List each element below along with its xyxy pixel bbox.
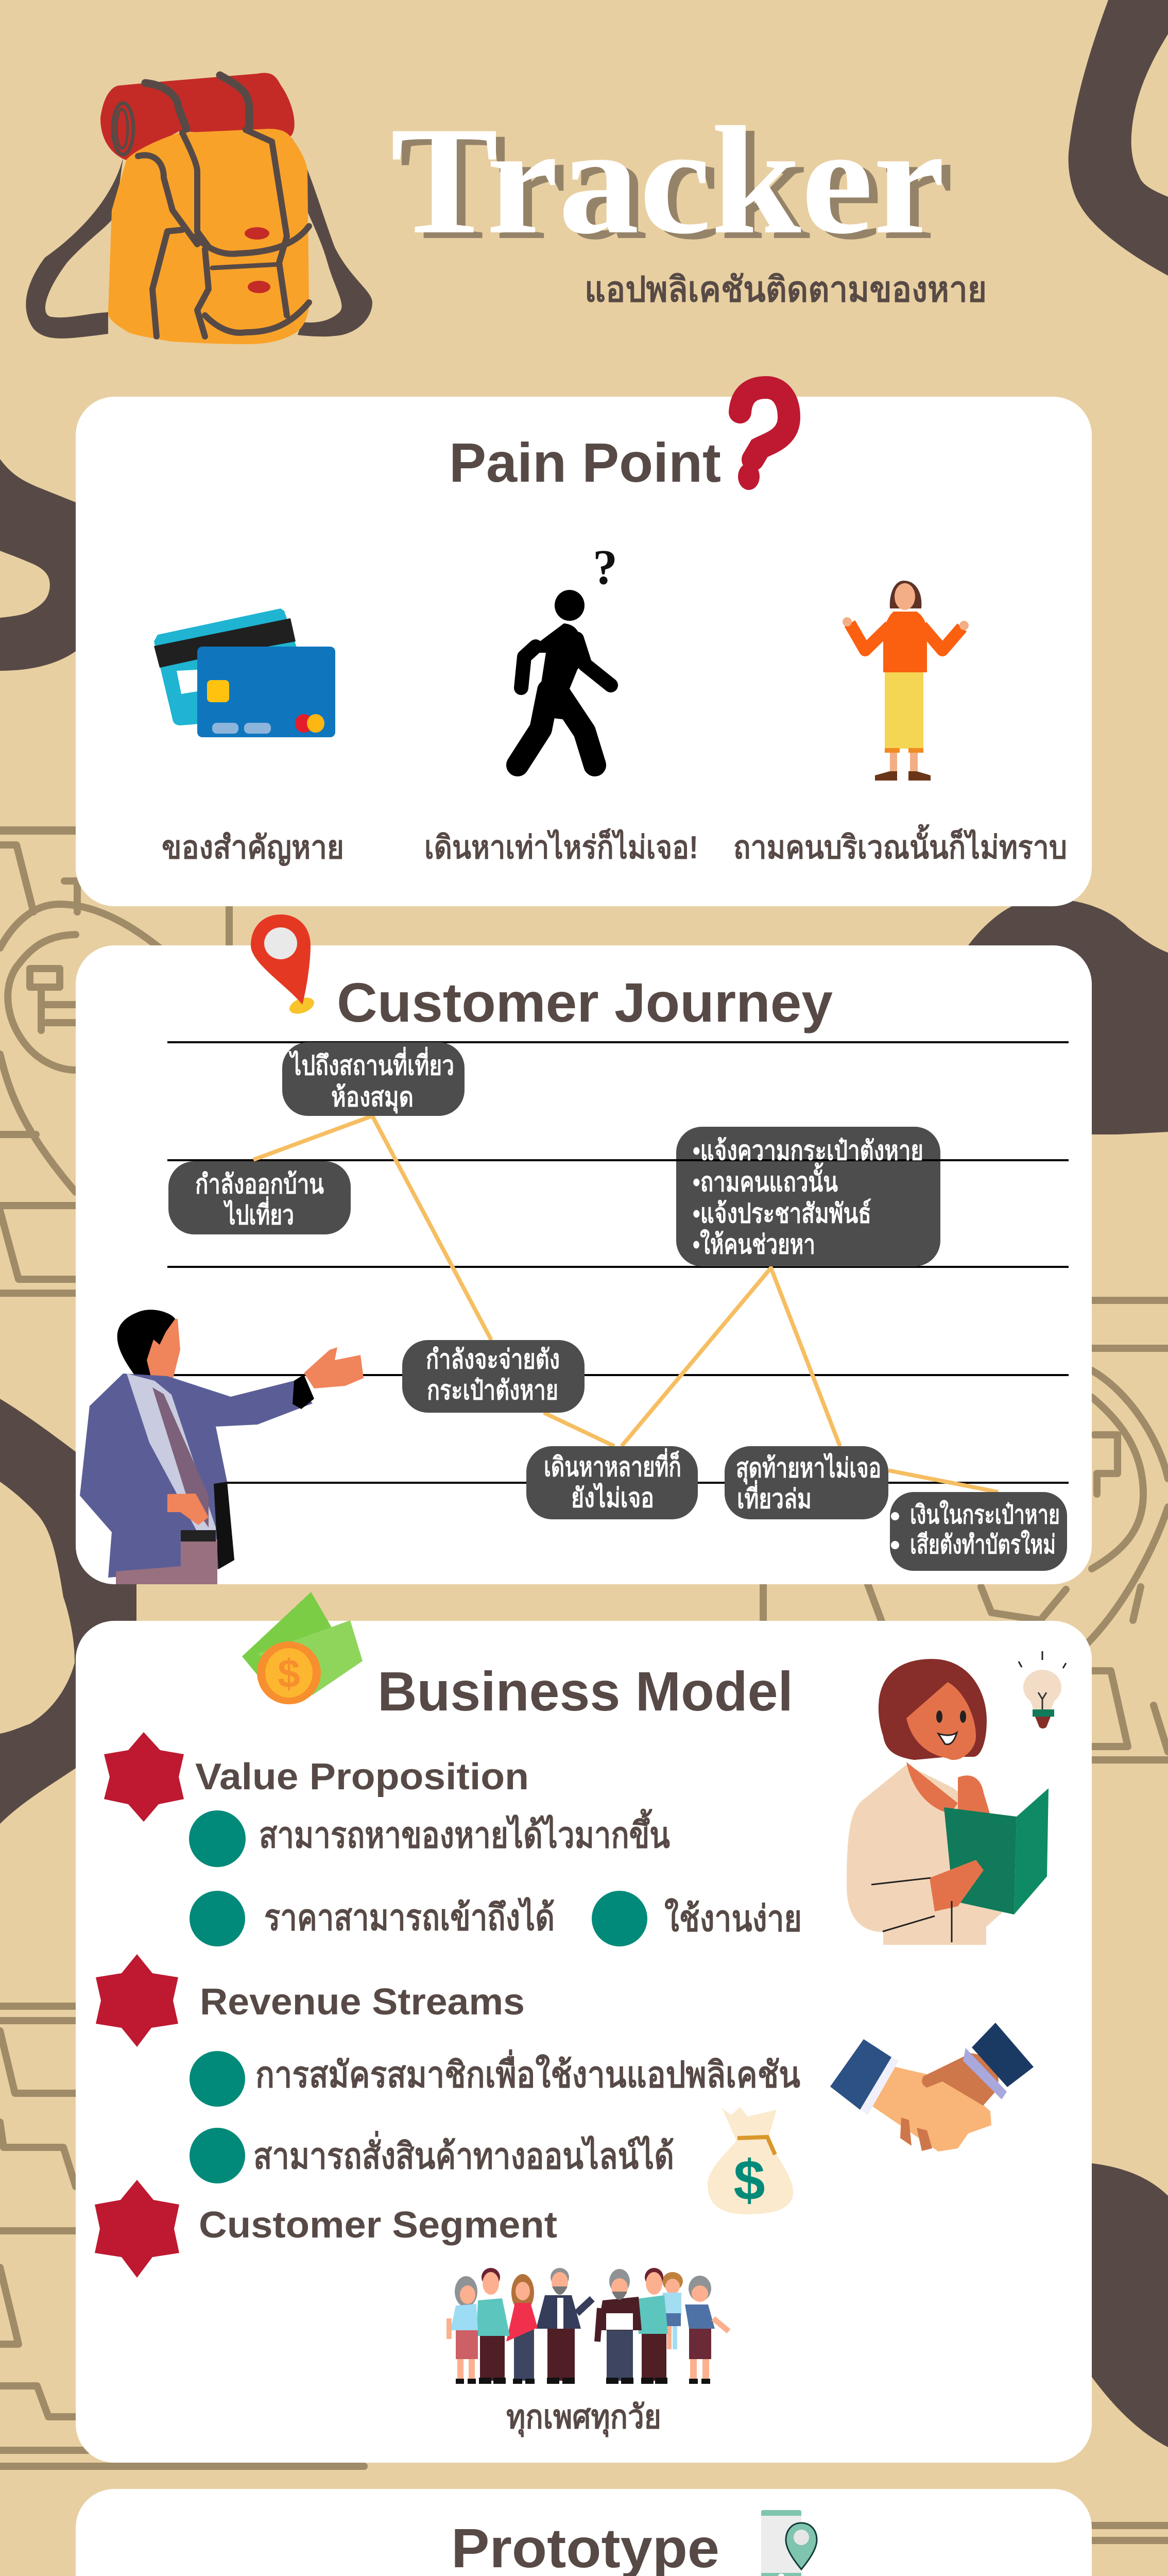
icon: backpack: [26, 73, 372, 344]
step: reporting lost wallet: •แจ้งความกระเป๋าตังหาย: [693, 1136, 923, 1166]
icon: credit cards: [154, 608, 335, 737]
step: wallet missing at payment: กำลังจะจ่ายตัง: [426, 1345, 560, 1375]
illustration: handshake: [830, 2023, 1034, 2151]
step: reporting lost wallet: [676, 1127, 940, 1266]
panel: Business Model: [76, 1592, 1092, 2463]
bullet: find lost items faster: สามารถหาของหายได้ไวมากขึ้น: [259, 1808, 670, 1855]
step: trip ruined: สุดท้ายหาไม่เจอ: [736, 1452, 881, 1485]
bullet: find lost items faster: [189, 1808, 670, 1867]
icon: money and coin: [242, 1592, 363, 1704]
panel: Pain Point: [76, 387, 1092, 906]
label: asked people nearby: ถามคนบริเวณนั้นก็ไม่ทราบ: [733, 824, 1067, 866]
panel: Customer Journey: [76, 914, 1092, 1584]
subtitle: แอปพลิเคชันติดตามของหาย: [585, 270, 987, 309]
icon: red question mark: [738, 387, 789, 490]
bullet: easy to use: [592, 1891, 802, 1946]
bullet: easy to use: ใช้งานง่าย: [664, 1897, 802, 1939]
step: wallet missing at payment: กระเป๋าตังหาย: [427, 1376, 558, 1405]
step: arrive at destination: ไปถึงสถานที่เที่ยว: [288, 1047, 454, 1081]
panel: Prototype: [76, 2489, 1092, 2576]
step: reporting lost wallet: •ถามคนแถวนั้น: [693, 1162, 838, 1197]
step: trip ruined: เที่ยวล่ม: [737, 1480, 812, 1514]
step: leaving home: ไปเที่ยว: [223, 1196, 294, 1230]
icon: walking figure with question mark: ?: [593, 539, 617, 595]
step: leaving home: [168, 1161, 351, 1234]
bullet: affordable price: [190, 1891, 555, 1946]
bullet star: Customer Segment: [95, 2180, 179, 2278]
step: money and card costs: เงินในกระเป๋าหาย: [910, 1500, 1060, 1529]
subheading: Value Proposition: Value Proposition: [195, 1756, 529, 1798]
icon: walking figure with question mark: [518, 539, 617, 765]
journey line: [253, 1116, 998, 1492]
step: leaving home: กำลังออกบ้าน: [195, 1170, 324, 1199]
step: reporting lost wallet: •แจ้งประชาสัมพันธ์: [693, 1198, 871, 1229]
step: reporting lost wallet: •ให้คนช่วยหา: [693, 1229, 815, 1260]
step: arrive at destination: ห้องสมุด: [331, 1082, 414, 1114]
icon: phone with location pin: [761, 2510, 817, 2576]
bullet star: Value Proposition: [104, 1732, 184, 1822]
icon: location pin: [251, 914, 316, 1017]
step: trip ruined: [725, 1446, 888, 1519]
label: all genders and ages: ทุกเพศทุกวัย: [506, 2398, 661, 2437]
bullet: affordable price: ราคาสามารถเข้าถึงได้: [264, 1896, 555, 1938]
step: searching many places: เดินหาหลายที่ก็: [544, 1448, 681, 1482]
icon: money bag: [708, 2107, 793, 2214]
label: lost valuables: ของสำคัญหาย: [162, 830, 344, 866]
heading: Business Model: Business Model: [377, 1660, 793, 1722]
step: wallet missing at payment: [402, 1340, 585, 1413]
title: Tracker: Tracker: [399, 100, 954, 272]
title: Tracker: Tracker: [390, 95, 945, 266]
illustration: woman with book: [847, 1659, 1049, 1945]
step: money and card costs: [890, 1492, 1067, 1571]
step: searching many places: [526, 1446, 698, 1519]
illustration: group of people: [449, 2268, 729, 2384]
icon: money bag: $: [733, 2149, 765, 2212]
heading: Pain Point: Pain Point: [449, 431, 721, 494]
step: money and card costs: เสียตังทำบัตรใหม่: [910, 1530, 1056, 1559]
label: searching everywhere: เดินหาเท่าไหร่ก็ไม่เจอ!: [424, 828, 698, 866]
bullet star: Revenue Streams: [96, 1954, 178, 2047]
illustration: presenter man: [80, 1310, 364, 1584]
chart grid lines: [167, 1042, 1069, 1483]
bullet: online ordering: [190, 2128, 674, 2183]
icon: woman shrugging: [843, 581, 969, 781]
step: arrive at destination: [282, 1042, 465, 1116]
subheading: Customer Segment: Customer Segment: [199, 2205, 557, 2246]
icon: money and coin: $: [278, 1651, 300, 1696]
heading: Customer Journey: Customer Journey: [337, 971, 833, 1033]
icon: lightbulb: [1019, 1651, 1066, 1728]
step: searching many places: ยังไม่เจอ: [571, 1482, 654, 1513]
bullet: online ordering: สามารถสั่งสินค้าทางออนไลน์ได้: [253, 2130, 674, 2176]
bullet: membership: [190, 2049, 800, 2107]
bullet: membership: การสมัครสมาชิกเพื่อใช้งานแอปพลิเคชัน: [255, 2049, 800, 2095]
subheading: Revenue Streams: Revenue Streams: [200, 1981, 525, 2023]
